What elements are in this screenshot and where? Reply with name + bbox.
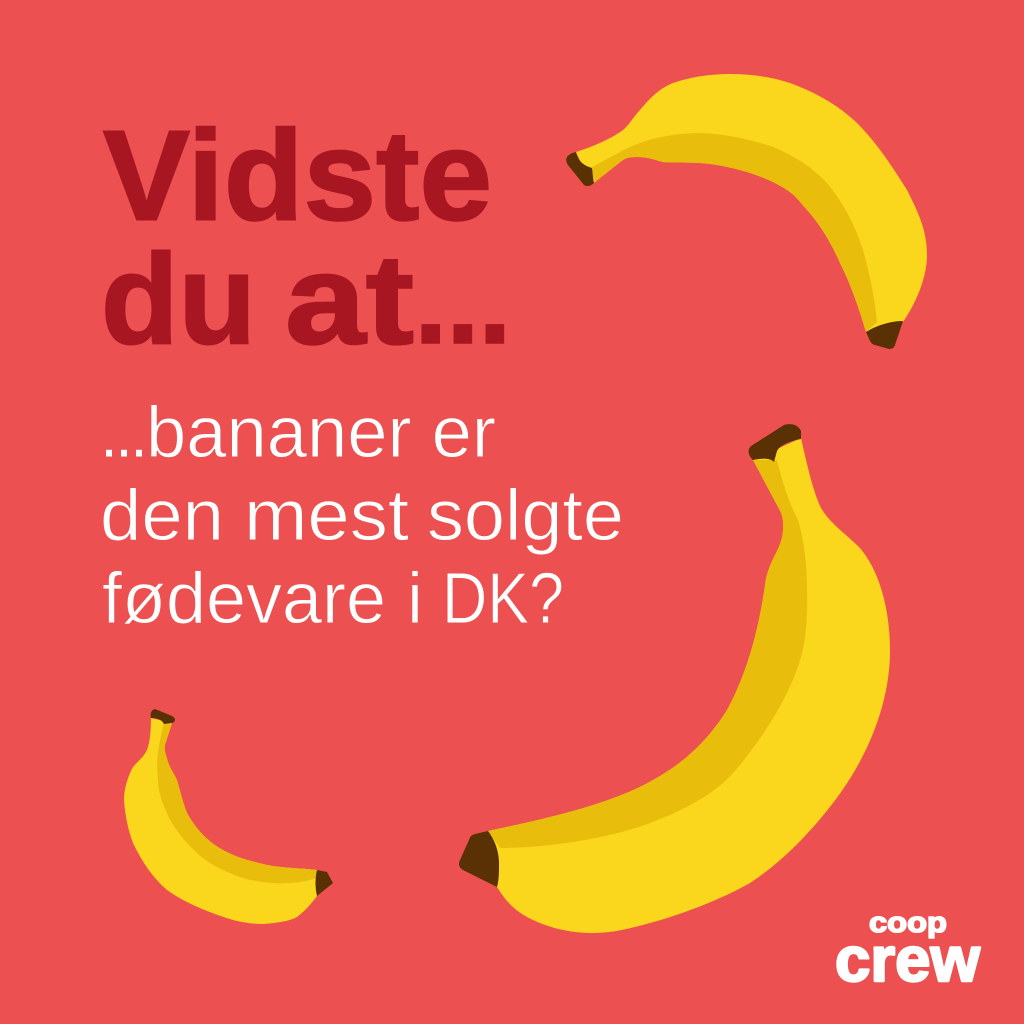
text block: banana fact: i xyxy=(407,559,423,639)
text block: banana fact: DK? xyxy=(442,559,564,639)
icon: large banana xyxy=(459,424,890,933)
title: Vidste du at...: Vidste xyxy=(103,104,492,248)
text block: banana fact: den xyxy=(100,476,224,556)
text block: banana fact: ... xyxy=(99,393,144,473)
text block: banana fact: solgte xyxy=(427,476,624,556)
logo: coop crew: coop xyxy=(869,907,947,939)
text block: banana fact: fødevare xyxy=(102,559,386,639)
title: Vidste du at...: at xyxy=(285,228,414,372)
title: Vidste du at...: ... xyxy=(413,228,509,372)
title: Vidste du at...: du xyxy=(101,228,256,372)
title: Vidste du at... xyxy=(101,104,509,372)
text block: banana fact: mest xyxy=(244,476,409,556)
icon: top banana xyxy=(566,74,927,349)
icon: small banana xyxy=(124,709,333,924)
text block: banana fact: bananer er xyxy=(146,393,496,473)
text block: banana fact xyxy=(99,393,624,639)
logo: coop crew: crew xyxy=(835,925,981,995)
